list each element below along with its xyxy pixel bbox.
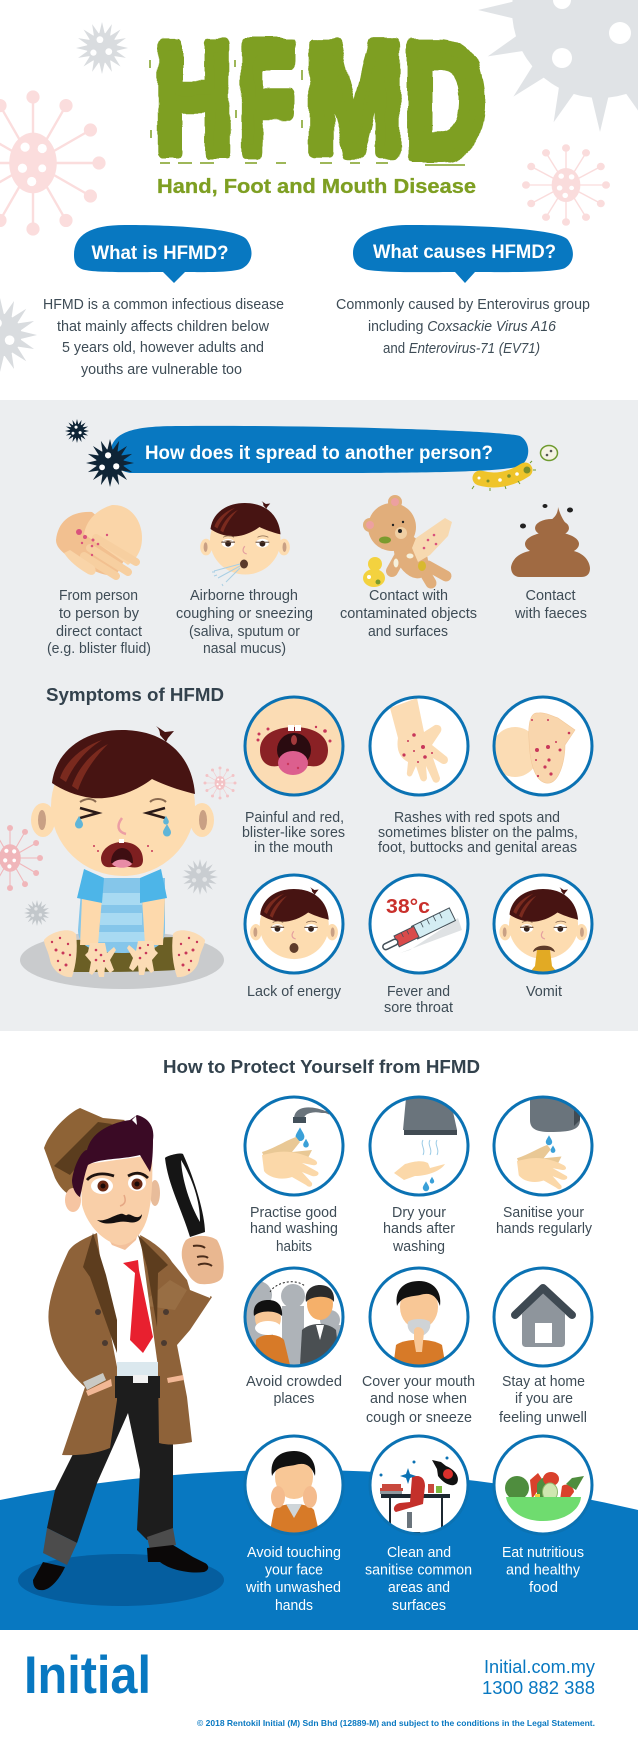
icon: grey virus top left xyxy=(76,22,128,74)
text: spread captions: nasal mucus) xyxy=(203,641,286,657)
text: causes xyxy=(336,297,590,357)
panel: what causes HFMD xyxy=(336,225,590,357)
footer logo: Initial: Initial xyxy=(24,1646,151,1705)
text: spread captions: contaminated objects xyxy=(340,606,477,622)
icon: grey virus left edge xyxy=(0,298,37,372)
pocket hand xyxy=(83,1373,106,1390)
text: spread captions: Contact xyxy=(526,588,576,604)
icon: large grey virus top right xyxy=(478,0,638,132)
shadow under detective xyxy=(18,1554,224,1606)
text: definition: that mainly affects children below xyxy=(57,319,270,335)
moustache xyxy=(97,1214,142,1224)
caption: fever: sore throat xyxy=(384,1000,453,1016)
title: HFMD: D xyxy=(405,13,484,191)
footer legal: © 2018 Rentokil Initial (M) Sdn Bhd (12889-M) and subject to the conditions in the Legal Statement. xyxy=(197,1718,595,1728)
caption: healthy food: food xyxy=(529,1580,558,1596)
icon circle: sanitise hands xyxy=(494,1097,592,1195)
icon circle: avoid touching face xyxy=(245,1436,343,1536)
caption: mouth sores: Painful and red, xyxy=(245,810,344,826)
caption: lack of energy: Lack of energy xyxy=(247,984,342,1000)
caption: cover mouth: cough or sneeze xyxy=(366,1410,472,1426)
caption: clean surfaces: sanitise common xyxy=(365,1562,472,1578)
caption: rashes: Rashes with red spots and xyxy=(394,810,560,826)
caption: stay home: if you are xyxy=(515,1391,573,1407)
caption: hand washing: hand washing xyxy=(250,1221,338,1237)
hair xyxy=(72,1115,153,1197)
caption: vomit: Vomit xyxy=(526,984,562,1000)
icon: small grey virus near child xyxy=(24,900,50,926)
icon circle: fever thermometer: 38°c xyxy=(386,896,430,918)
footer contact: Initial.com.my xyxy=(484,1656,596,1677)
text: spread captions: with faeces xyxy=(514,606,587,622)
heading pill: how does it spread xyxy=(111,426,528,473)
text: spread captions: Contact with xyxy=(369,588,448,604)
caption: dry hands: Dry your xyxy=(392,1205,446,1221)
icon circle: fever thermometer xyxy=(370,875,468,973)
icon circle: hand washing xyxy=(245,1097,343,1195)
caption: mouth sores: in the mouth xyxy=(254,840,333,856)
icon circle: healthy food xyxy=(494,1436,592,1534)
caption: rashes: sometimes blister on the palms, xyxy=(378,825,578,841)
subtitle: Hand, Foot and Mouth Disease xyxy=(157,175,476,198)
text: causes: Commonly caused by Enterovirus group xyxy=(336,297,590,313)
heading: protect: How to Protect Yourself from HFMD xyxy=(163,1057,480,1077)
caption: cover mouth: Cover your mouth xyxy=(362,1374,475,1390)
icon: pink virus near child right xyxy=(204,766,236,800)
caption: fever: Fever and xyxy=(387,984,450,1000)
icon: faeces with flies xyxy=(511,504,590,577)
text: causes: and Enterovirus-71 (EV71) xyxy=(383,341,540,357)
caption: crowded: places xyxy=(274,1391,314,1407)
footer contact: 1300 882 388 xyxy=(482,1677,595,1698)
caption: touching face: Avoid touching xyxy=(247,1545,341,1561)
caption: mouth sores xyxy=(242,810,345,856)
icon: small black virus xyxy=(65,419,89,443)
text: definition: HFMD is a common infectious disease xyxy=(43,297,284,313)
panel: grey section background xyxy=(0,400,638,1031)
caption: crowded: Avoid crowded xyxy=(246,1374,342,1390)
icon circle: lack of energy xyxy=(245,875,343,973)
text: spread captions: direct contact xyxy=(56,624,142,640)
panel: blue wave xyxy=(0,1470,638,1630)
panel: what is HFMD xyxy=(43,225,284,378)
caption: clean surfaces: Clean and xyxy=(387,1545,451,1561)
text: causes: including Coxsackie Virus A16 xyxy=(368,319,557,335)
icon: pink virus near child left xyxy=(0,825,43,891)
caption: fever xyxy=(384,984,453,1016)
icon: small pink virus right xyxy=(522,144,610,226)
caption: stay home xyxy=(499,1374,587,1426)
text: spread captions: (saliva, sputum or xyxy=(189,624,300,640)
heading pill: What causes HFMD?: What causes HFMD? xyxy=(373,242,556,263)
heading pill: What is HFMD?: What is HFMD? xyxy=(92,243,228,264)
caption: clean surfaces: areas and xyxy=(388,1580,450,1596)
caption: sanitise: Sanitise your xyxy=(503,1205,584,1221)
caption: hand washing: Practise good xyxy=(250,1205,337,1221)
icon: coughing boy xyxy=(200,501,290,586)
caption: touching face: with unwashed xyxy=(245,1580,341,1596)
icon: large pink virus left xyxy=(0,90,106,236)
title: HFMD: M xyxy=(306,13,403,186)
caption: rashes xyxy=(378,810,578,856)
heading pill: What is HFMD? xyxy=(74,225,252,283)
caption: hand washing: habits xyxy=(276,1239,312,1255)
icon: large black virus xyxy=(86,439,134,487)
trousers xyxy=(47,1370,173,1543)
icon circle: mouth sores xyxy=(245,697,343,795)
caption: stay home: Stay at home xyxy=(502,1374,585,1390)
text: spread captions: and surfaces xyxy=(368,624,448,640)
text: definition: 5 years old, however adults and xyxy=(62,340,264,356)
icon: green cell xyxy=(540,446,558,460)
heading pill: What causes HFMD? xyxy=(353,225,573,283)
icon circle: crowd xyxy=(243,1268,345,1366)
tie xyxy=(123,1260,153,1353)
caption: sanitise: hands regularly xyxy=(496,1221,593,1237)
heading pill: how does it spread: How does it spread to another person? xyxy=(145,443,493,464)
icon circle: vomit xyxy=(494,875,592,973)
icon circle: foot rash xyxy=(491,697,592,795)
icon circle: dry hands xyxy=(370,1097,468,1195)
caption: healthy food: Eat nutritious xyxy=(502,1545,584,1561)
caption: hand washing xyxy=(250,1205,338,1255)
icon circle: hand rash xyxy=(370,697,468,795)
icon circle: cover mouth xyxy=(370,1268,468,1368)
shirt xyxy=(97,1233,158,1367)
caption: dry hands: hands after xyxy=(383,1221,455,1237)
caption: dry hands: washing xyxy=(392,1239,445,1255)
illustration: crying child xyxy=(20,726,224,989)
hand xyxy=(182,1236,224,1284)
caption: touching face: hands xyxy=(275,1598,313,1614)
hat xyxy=(44,1108,125,1196)
icon circle: clean surfaces xyxy=(370,1436,468,1536)
caption: healthy food xyxy=(502,1545,584,1596)
caption: mouth sores: blister-like sores xyxy=(242,825,345,841)
caption: clean surfaces xyxy=(365,1545,472,1614)
buttons xyxy=(95,1309,169,1346)
neck xyxy=(100,1225,140,1250)
text: definition xyxy=(43,297,284,378)
title: HFMD xyxy=(150,11,484,191)
caption: touching face xyxy=(245,1545,341,1614)
shoes xyxy=(33,1562,65,1590)
coat xyxy=(48,1233,212,1455)
text: spread captions: coughing or sneezing xyxy=(176,606,313,622)
face xyxy=(80,1155,152,1245)
title: HFMD: H xyxy=(156,13,232,186)
title: HFMD: F xyxy=(240,11,295,185)
caption: healthy food: and healthy xyxy=(506,1562,581,1578)
icon: handshake xyxy=(56,505,142,576)
lapels xyxy=(83,1233,117,1353)
text: definition: youths are vulnerable too xyxy=(81,362,242,378)
text: spread captions: Airborne through xyxy=(190,588,298,604)
icon: yellow bacterium xyxy=(472,461,536,491)
heading: symptoms: Symptoms of HFMD xyxy=(46,685,224,705)
caption: crowded xyxy=(246,1374,342,1407)
text: spread captions: From person xyxy=(59,588,138,604)
text: spread captions: to person by xyxy=(59,606,140,622)
caption: stay home: feeling unwell xyxy=(499,1410,587,1426)
text: spread captions xyxy=(47,588,587,657)
caption: touching face: your face xyxy=(265,1562,323,1578)
caption: clean surfaces: surfaces xyxy=(392,1598,446,1614)
caption: dry hands xyxy=(383,1205,455,1255)
eyes xyxy=(91,1178,113,1194)
caption: cover mouth: and nose when xyxy=(370,1391,467,1407)
illustration: detective xyxy=(33,1108,224,1590)
caption: cover mouth xyxy=(362,1374,475,1426)
icon: contaminated teddy and duck xyxy=(363,495,452,587)
sleeve cuff xyxy=(187,1280,212,1298)
caption: rashes: foot, buttocks and genital areas xyxy=(378,840,577,856)
icon circle: stay home xyxy=(494,1268,592,1366)
ears xyxy=(65,1188,81,1212)
text: spread captions: (e.g. blister fluid) xyxy=(47,641,151,657)
magnifying glass xyxy=(165,1153,205,1237)
caption: sanitise xyxy=(496,1205,593,1237)
icon: grey virus near child xyxy=(182,859,218,895)
footer contact xyxy=(482,1656,596,1698)
